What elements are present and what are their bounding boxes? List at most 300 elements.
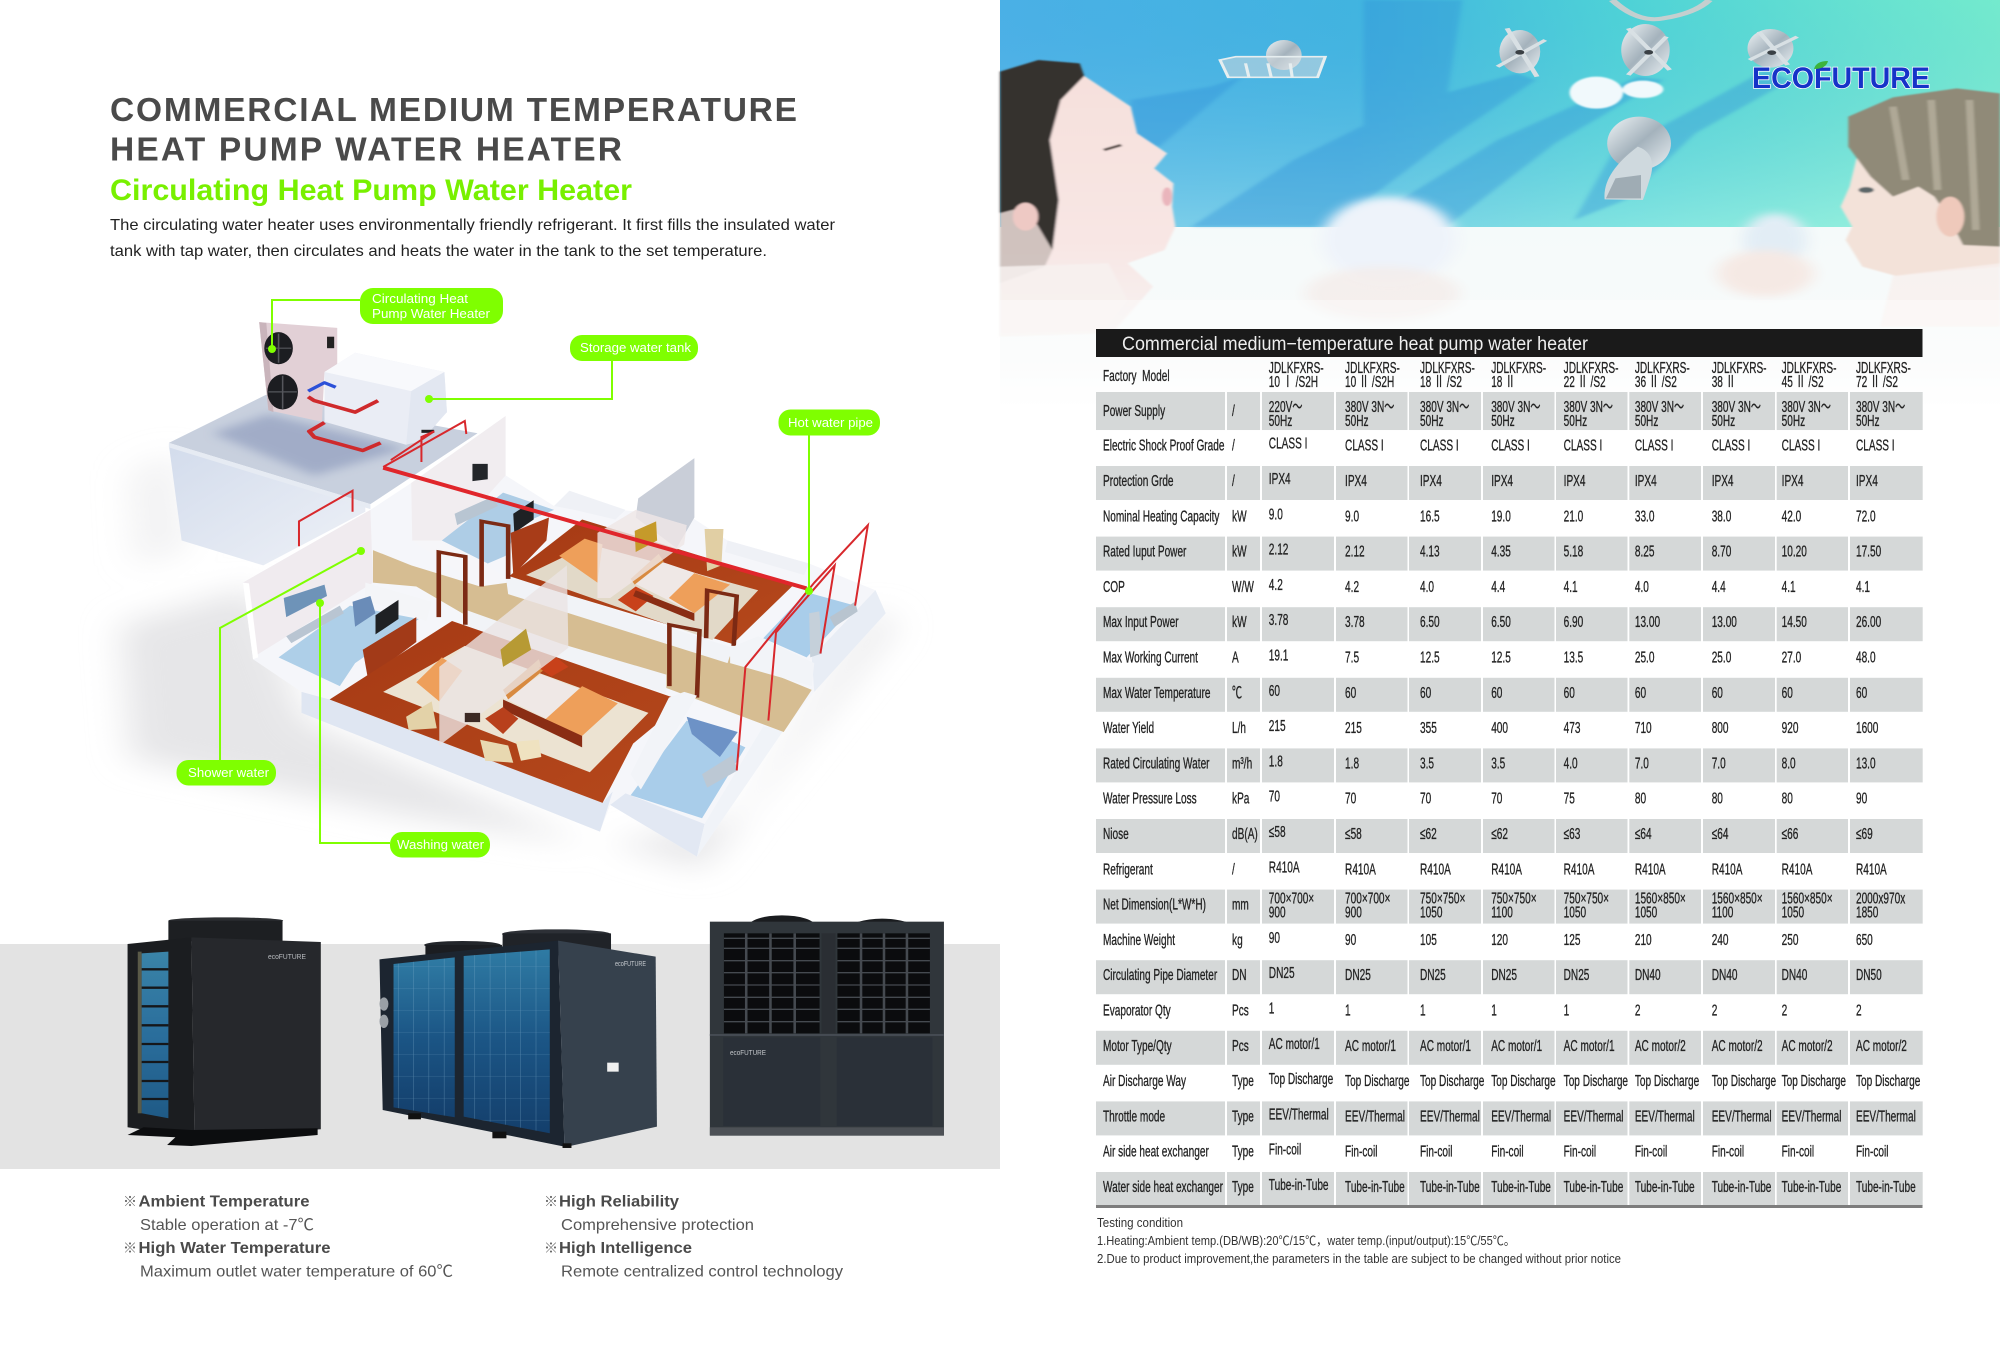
row: evaporator: 1 bbox=[1269, 999, 1274, 1017]
row: pipe diameter: DN bbox=[1232, 966, 1247, 984]
row: COP: W/W bbox=[1232, 578, 1254, 595]
row: max current bbox=[1103, 646, 1876, 666]
row: max input: 13.00 bbox=[1635, 613, 1660, 631]
row: power supply: / bbox=[1232, 402, 1235, 420]
row: air side exchanger: Air side heat exchanger bbox=[1103, 1142, 1209, 1160]
row: max water temperature: 60 bbox=[1269, 681, 1280, 699]
row: throttle: EEV/Thermal bbox=[1635, 1107, 1695, 1125]
spout bbox=[1604, 117, 1671, 200]
row: max water temperature: 60 bbox=[1564, 683, 1575, 701]
row: air side exchanger: Fin-coil bbox=[1564, 1142, 1596, 1160]
row: COP: 4.0 bbox=[1420, 578, 1434, 595]
row: power supply: 50Hz bbox=[1635, 412, 1659, 430]
foam and hands bbox=[1306, 197, 1813, 320]
row: COP bbox=[1103, 576, 1870, 595]
row: COP: 4.4 bbox=[1712, 578, 1726, 595]
row: power supply: 50Hz bbox=[1269, 412, 1293, 430]
row: water yield: 920 bbox=[1782, 719, 1798, 737]
row: protection: IPX4 bbox=[1635, 472, 1657, 490]
row: max water temperature: 60 bbox=[1420, 683, 1431, 701]
row: COP: 4.1 bbox=[1564, 578, 1578, 595]
row: air side exchanger bbox=[1103, 1140, 1888, 1160]
row: protection bbox=[1096, 466, 1923, 500]
row: evaporator: 2 bbox=[1856, 1001, 1862, 1019]
row: COP: 4.0 bbox=[1635, 578, 1649, 595]
row: refrigerant: R410A bbox=[1782, 860, 1812, 878]
row: pipe diameter: DN25 bbox=[1491, 966, 1517, 984]
row: net dimension: 1850 bbox=[1856, 903, 1878, 921]
row: net dimension: 750×750× bbox=[1564, 889, 1609, 907]
row: factory model: 22 Ⅱ /S2 bbox=[1564, 373, 1606, 391]
row: refrigerant: R410A bbox=[1856, 860, 1887, 878]
row: net dimension: 750×750× bbox=[1420, 889, 1465, 907]
child bbox=[1841, 88, 2000, 327]
row: electric shock bbox=[1103, 434, 1895, 454]
row: noise: ≤64 bbox=[1635, 825, 1652, 843]
row: water yield: 1600 bbox=[1856, 719, 1878, 737]
row: rated input: kW bbox=[1232, 542, 1247, 560]
row: rated input bbox=[1096, 537, 1923, 571]
row: power supply: 380V 3N～ bbox=[1564, 398, 1613, 416]
row: evaporator: 1 bbox=[1345, 1001, 1351, 1019]
row: rated input: 2.12 bbox=[1269, 540, 1288, 558]
row: circulating water: 1.8 bbox=[1345, 754, 1359, 772]
row: nominal heating: Nominal Heating Capacity bbox=[1103, 507, 1220, 525]
row: water side exchanger: Tube-in-Tube bbox=[1420, 1178, 1480, 1196]
row: noise: ≤69 bbox=[1856, 825, 1873, 843]
row: factory model: 72 Ⅱ /S2 bbox=[1856, 373, 1898, 391]
row: noise: ≤58 bbox=[1269, 823, 1286, 841]
row: rated input: 4.35 bbox=[1491, 542, 1511, 560]
product logo 2: ecoFUTURE bbox=[615, 959, 646, 968]
intro paragraph: tank with tap water, then circulates and heats the water in the tank to the set temperature. bbox=[110, 243, 767, 260]
row: air side exchanger: Fin-coil bbox=[1856, 1142, 1888, 1160]
row: power supply: 50Hz bbox=[1491, 412, 1515, 430]
row: pressure loss: 70 bbox=[1345, 789, 1356, 807]
row: pipe diameter: DN40 bbox=[1635, 966, 1661, 984]
row: net dimension: 1050 bbox=[1782, 903, 1804, 921]
row: circulating water: Rated Circulating Water bbox=[1103, 754, 1210, 772]
row: max current: 48.0 bbox=[1856, 648, 1876, 666]
row: water side exchanger: Tube-in-Tube bbox=[1564, 1178, 1623, 1196]
intro paragraph bbox=[110, 217, 836, 260]
row: max current: 27.0 bbox=[1782, 648, 1801, 666]
row: pipe diameter: DN25 bbox=[1345, 966, 1371, 984]
feature list right: High Reliability bbox=[559, 1194, 679, 1210]
row: water side exchanger: Tube-in-Tube bbox=[1782, 1178, 1841, 1196]
row: pipe diameter: DN25 bbox=[1564, 966, 1589, 984]
row: max input: kW bbox=[1232, 613, 1247, 631]
row: factory model: 18 Ⅱ bbox=[1491, 373, 1515, 391]
row: max water temperature: Max Water Temperature bbox=[1103, 683, 1210, 701]
callout: hot water pipe bbox=[778, 410, 880, 595]
row: electric shock: CLASS I bbox=[1712, 436, 1750, 454]
row: max water temperature: 60 bbox=[1491, 683, 1502, 701]
woman bbox=[1000, 60, 1175, 337]
row: power supply: 50Hz bbox=[1712, 412, 1735, 430]
row: electric shock: CLASS I bbox=[1269, 434, 1307, 452]
row: air side exchanger: Fin-coil bbox=[1491, 1142, 1524, 1160]
row: protection: IPX4 bbox=[1491, 472, 1513, 490]
row: protection: IPX4 bbox=[1420, 472, 1442, 490]
row: net dimension: 750×750× bbox=[1491, 889, 1537, 907]
feature list left: Maximum outlet water temperature of 60℃ bbox=[140, 1264, 453, 1280]
row: factory model: JDLKFXRS- bbox=[1269, 359, 1324, 377]
callout: hot water pipe: Hot water pipe bbox=[788, 415, 873, 430]
hot water pipes bbox=[299, 421, 868, 770]
banner: bathroom scene bbox=[1000, 0, 2000, 410]
title: COMMERCIAL MEDIUM TEMPERATURE bbox=[110, 92, 797, 129]
row: machine weight: 240 bbox=[1712, 931, 1729, 948]
row: evaporator: 2 bbox=[1782, 1001, 1787, 1019]
title: HEAT PUMP WATER HEATER bbox=[110, 132, 622, 168]
ground shadows bbox=[120, 452, 896, 870]
table header bar: Commercial medium−temperature heat pump water heater bbox=[1122, 334, 1589, 355]
row: refrigerant: R410A bbox=[1420, 860, 1451, 878]
row: refrigerant: / bbox=[1232, 860, 1235, 878]
row: pipe diameter: DN40 bbox=[1782, 966, 1807, 984]
row: protection: IPX4 bbox=[1269, 470, 1291, 488]
row: water yield bbox=[1103, 717, 1878, 737]
row: pressure loss: 70 bbox=[1269, 787, 1280, 805]
row: air discharge: Top Discharge bbox=[1712, 1072, 1776, 1090]
row: factory model: 45 Ⅱ /S2 bbox=[1782, 373, 1824, 391]
row: air side exchanger: Type bbox=[1232, 1142, 1254, 1160]
row: net dimension: 700×700× bbox=[1269, 889, 1314, 907]
row: machine weight: 650 bbox=[1856, 931, 1873, 948]
row: pressure loss: 90 bbox=[1856, 789, 1867, 807]
grey product band bbox=[0, 944, 1000, 1169]
callout: heat pump: Pump Water Heater bbox=[372, 306, 491, 321]
row: water yield: 215 bbox=[1345, 719, 1362, 737]
handles bbox=[1497, 24, 1797, 77]
row: net dimension: mm bbox=[1232, 895, 1249, 913]
row: max input: 6.50 bbox=[1420, 613, 1440, 631]
row: throttle: EEV/Thermal bbox=[1712, 1107, 1772, 1125]
row: water side exchanger: Tube-in-Tube bbox=[1712, 1178, 1771, 1196]
row: max water temperature: ℃ bbox=[1232, 683, 1242, 701]
row: noise: Niose bbox=[1103, 825, 1129, 843]
row: throttle: Type bbox=[1232, 1107, 1254, 1125]
row: net dimension: 1100 bbox=[1712, 903, 1733, 921]
intro paragraph: The circulating water heater uses environmentally friendly refrigerant. It first fills the insulated water bbox=[110, 217, 836, 234]
product logo 1: ecoFUTURE bbox=[268, 952, 306, 961]
row: power supply: 380V 3N～ bbox=[1782, 398, 1831, 416]
feature list left: Ambient Temperature bbox=[138, 1194, 310, 1210]
row: factory model: 38 Ⅱ bbox=[1712, 373, 1736, 391]
feature list left: ※ bbox=[123, 1194, 137, 1210]
row: electric shock: CLASS I bbox=[1345, 436, 1384, 454]
row: max water temperature: 60 bbox=[1635, 683, 1646, 701]
row: factory model: JDLKFXRS- bbox=[1564, 359, 1619, 377]
row: COP: 4.4 bbox=[1491, 578, 1506, 595]
row: air discharge: Top Discharge bbox=[1782, 1072, 1846, 1090]
row: net dimension: 1560×850× bbox=[1712, 889, 1763, 907]
feature list left: Stable operation at -7℃ bbox=[140, 1217, 314, 1234]
row: power supply: 50Hz bbox=[1564, 412, 1587, 430]
row: noise: ≤58 bbox=[1345, 825, 1362, 843]
row: evaporator bbox=[1103, 999, 1862, 1019]
row: noise: ≤63 bbox=[1564, 825, 1580, 843]
wall gradient bbox=[1000, 0, 2000, 228]
row: electric shock: CLASS I bbox=[1635, 436, 1673, 454]
row: pressure loss: 75 bbox=[1564, 789, 1575, 807]
row: air discharge: Type bbox=[1232, 1072, 1254, 1090]
row: rated input: 4.13 bbox=[1420, 542, 1440, 560]
row: COP: COP bbox=[1103, 578, 1125, 595]
row: air discharge: Top Discharge bbox=[1564, 1072, 1628, 1090]
row: machine weight: 120 bbox=[1491, 931, 1508, 948]
row: max input: 6.50 bbox=[1491, 613, 1511, 631]
lower guest room bbox=[330, 565, 684, 803]
row: max current: 12.5 bbox=[1491, 648, 1511, 666]
row: power supply bbox=[1096, 392, 1923, 430]
row: machine weight: kg bbox=[1232, 931, 1243, 948]
row: circulating water: 4.0 bbox=[1564, 754, 1578, 772]
row: max input: 13.00 bbox=[1712, 613, 1737, 631]
row: air side exchanger: Fin-coil bbox=[1782, 1142, 1814, 1160]
row: machine weight: 90 bbox=[1345, 931, 1356, 948]
heat pump unit bbox=[259, 322, 337, 422]
row: factory model: 10 Ⅰ /S2H bbox=[1269, 373, 1318, 391]
bath foam base bbox=[1000, 227, 2000, 407]
row: nominal heating: 16.5 bbox=[1420, 507, 1440, 525]
row: max water temperature bbox=[1096, 678, 1923, 712]
product: large front-view heat pump bbox=[710, 915, 944, 1136]
row: nominal heating: 33.0 bbox=[1635, 507, 1654, 525]
row: max input: 3.78 bbox=[1269, 611, 1288, 629]
row: net dimension: 900 bbox=[1269, 903, 1286, 921]
row: air side exchanger: Fin-coil bbox=[1420, 1142, 1452, 1160]
row: water yield: 473 bbox=[1564, 719, 1580, 737]
row: water side exchanger bbox=[1096, 1172, 1923, 1206]
row: throttle: EEV/Thermal bbox=[1856, 1107, 1916, 1125]
row: circulating water: 7.0 bbox=[1635, 754, 1649, 772]
row: noise: ≤62 bbox=[1491, 825, 1508, 843]
row: electric shock: CLASS I bbox=[1782, 436, 1820, 454]
product logo 3: ecoFUTURE bbox=[730, 1048, 766, 1057]
row: circulating water: 8.0 bbox=[1782, 754, 1796, 772]
soap dish bbox=[1220, 40, 1325, 77]
row: max water temperature: 60 bbox=[1712, 683, 1723, 701]
product: tower heat pump bbox=[128, 917, 321, 1146]
row: motor: AC motor/1 bbox=[1269, 1034, 1320, 1052]
wall shadows bbox=[1131, 0, 1791, 227]
row: protection: IPX4 bbox=[1782, 472, 1804, 490]
testing notes bbox=[1097, 1216, 1621, 1266]
row: evaporator: 1 bbox=[1420, 1001, 1426, 1019]
row: air discharge: Top Discharge bbox=[1269, 1070, 1333, 1088]
row: water side exchanger: Tube-in-Tube bbox=[1345, 1178, 1405, 1196]
row: factory model: JDLKFXRS- bbox=[1491, 359, 1546, 377]
row: evaporator: Pcs bbox=[1232, 1001, 1249, 1019]
row: power supply: Power Supply bbox=[1103, 402, 1165, 420]
row: motor: Pcs bbox=[1232, 1036, 1249, 1054]
row: refrigerant: R410A bbox=[1712, 860, 1743, 878]
row: throttle: EEV/Thermal bbox=[1420, 1107, 1480, 1125]
row: circulating water: 7.0 bbox=[1712, 754, 1726, 772]
row: max current: 13.5 bbox=[1564, 648, 1583, 666]
row: throttle bbox=[1096, 1101, 1923, 1135]
tank pipes bbox=[308, 383, 434, 450]
row: evaporator: 1 bbox=[1564, 1001, 1569, 1019]
row: max current: Max Working Current bbox=[1103, 648, 1198, 666]
row: pressure loss: 80 bbox=[1635, 789, 1646, 807]
row: throttle: Throttle mode bbox=[1103, 1107, 1165, 1125]
feature list right: ※ bbox=[544, 1240, 558, 1256]
illustration: isometric building cutaway bbox=[120, 322, 896, 870]
row: air side exchanger: Fin-coil bbox=[1269, 1140, 1301, 1158]
row: air discharge: Top Discharge bbox=[1345, 1072, 1409, 1090]
row: net dimension: 1100 bbox=[1491, 903, 1513, 921]
row: pipe diameter: DN25 bbox=[1269, 964, 1295, 982]
row: rated input: 10.20 bbox=[1782, 542, 1807, 560]
row: COP: 4.2 bbox=[1269, 576, 1283, 593]
row: water side exchanger: Water side heat exchanger bbox=[1103, 1178, 1223, 1196]
row: refrigerant: R410A bbox=[1491, 860, 1522, 878]
row: net dimension bbox=[1096, 889, 1923, 924]
row: throttle: EEV/Thermal bbox=[1564, 1107, 1624, 1125]
feature list right: Comprehensive protection bbox=[561, 1217, 754, 1234]
row: max current: 25.0 bbox=[1635, 648, 1654, 666]
row: motor: AC motor/2 bbox=[1635, 1036, 1686, 1054]
foam on wall bbox=[1570, 77, 1663, 109]
row: evaporator: Evaporator Qty bbox=[1103, 1001, 1171, 1019]
subtitle: Circulating Heat Pump Water Heater bbox=[110, 174, 632, 207]
row: water yield: L/h bbox=[1232, 719, 1246, 737]
row: nominal heating: 21.0 bbox=[1564, 507, 1583, 525]
row: refrigerant: R410A bbox=[1564, 860, 1595, 878]
row: max water temperature: 60 bbox=[1782, 683, 1793, 701]
row: power supply: 380V 3N～ bbox=[1856, 398, 1905, 416]
row: net dimension: 1050 bbox=[1635, 903, 1657, 921]
row: factory model: 36 Ⅱ /S2 bbox=[1635, 373, 1677, 391]
row: pressure loss: 80 bbox=[1782, 789, 1793, 807]
row: max water temperature: 60 bbox=[1345, 683, 1356, 701]
row: motor: AC motor/1 bbox=[1491, 1036, 1542, 1054]
row: noise: ≤62 bbox=[1420, 825, 1437, 843]
row: pipe diameter: DN50 bbox=[1856, 966, 1882, 984]
row: max water temperature: 60 bbox=[1856, 683, 1867, 701]
row: power supply: 380V 3N～ bbox=[1491, 398, 1540, 416]
row: power supply: 380V 3N～ bbox=[1420, 398, 1469, 416]
row: power supply: 380V 3N～ bbox=[1635, 398, 1684, 416]
row: noise: ≤64 bbox=[1712, 825, 1729, 843]
testing notes: 2.Due to product improvement,the parameters in the table are subject to be changed without prior notice bbox=[1097, 1252, 1621, 1266]
row: net dimension: Net Dimension(L*W*H) bbox=[1103, 895, 1206, 913]
row: pressure loss bbox=[1103, 787, 1867, 807]
row: water yield: 400 bbox=[1491, 719, 1508, 737]
row: power supply: 50Hz bbox=[1782, 412, 1805, 430]
row: water yield: 800 bbox=[1712, 719, 1729, 737]
row: electric shock: CLASS I bbox=[1856, 436, 1895, 454]
feature list left: ※ bbox=[123, 1240, 137, 1256]
lower right bathroom bbox=[631, 692, 745, 818]
row: COP: 4.2 bbox=[1345, 578, 1359, 595]
row: motor: AC motor/2 bbox=[1856, 1036, 1907, 1054]
row: factory model bbox=[1103, 359, 1911, 391]
row: max input bbox=[1096, 607, 1923, 641]
row: factory model: JDLKFXRS- bbox=[1635, 359, 1690, 377]
row: machine weight: 105 bbox=[1420, 931, 1437, 948]
row: machine weight: 125 bbox=[1564, 931, 1580, 948]
feature list right bbox=[544, 1194, 843, 1280]
row: rated input: 17.50 bbox=[1856, 542, 1881, 560]
upper guest room bbox=[508, 458, 809, 644]
row: motor: Motor Type/Qty bbox=[1103, 1036, 1172, 1054]
row: factory model: JDLKFXRS- bbox=[1420, 359, 1475, 377]
callout: washing water: Washing water bbox=[397, 837, 485, 852]
row: air discharge: Air Discharge Way bbox=[1103, 1072, 1186, 1090]
row: machine weight: 210 bbox=[1635, 931, 1652, 948]
row: max input: 3.78 bbox=[1345, 613, 1365, 631]
row: factory model: JDLKFXRS- bbox=[1782, 359, 1836, 377]
row: motor: AC motor/2 bbox=[1782, 1036, 1833, 1054]
callout: storage water tank: Storage water tank bbox=[580, 340, 691, 355]
row: power supply: 380V 3N～ bbox=[1345, 398, 1394, 416]
left wall bbox=[243, 510, 373, 659]
row: refrigerant bbox=[1103, 858, 1887, 878]
row: air side exchanger: Fin-coil bbox=[1345, 1142, 1378, 1160]
row: nominal heating: 19.0 bbox=[1491, 507, 1511, 525]
row: electric shock: Electric Shock Proof Grade bbox=[1103, 436, 1224, 454]
hose bbox=[1612, 0, 1709, 19]
row: protection: Protection Grde bbox=[1103, 472, 1174, 490]
row: air discharge bbox=[1103, 1070, 1920, 1090]
row: factory model: JDLKFXRS- bbox=[1345, 359, 1400, 377]
row: rated input: 8.25 bbox=[1635, 542, 1654, 560]
row: rated input: 8.70 bbox=[1712, 542, 1731, 560]
row: motor: AC motor/1 bbox=[1420, 1036, 1471, 1054]
row: power supply: 380V 3N～ bbox=[1712, 398, 1761, 416]
upper white wall and bathroom bbox=[411, 416, 554, 586]
row: factory model: JDLKFXRS- bbox=[1856, 359, 1911, 377]
row: max current: 19.1 bbox=[1269, 646, 1288, 664]
row: air discharge: Top Discharge bbox=[1635, 1072, 1699, 1090]
row: water yield: 215 bbox=[1269, 717, 1286, 735]
row: pressure loss: 70 bbox=[1491, 789, 1502, 807]
row: factory model: JDLKFXRS- bbox=[1712, 359, 1767, 377]
corridor floor bbox=[373, 550, 812, 732]
row: circulating water: 3.5 bbox=[1491, 754, 1505, 772]
callout: shower water: Shower water bbox=[188, 765, 270, 780]
row: net dimension: 1560×850× bbox=[1782, 889, 1833, 907]
row: water side exchanger: Tube-in-Tube bbox=[1491, 1178, 1551, 1196]
rooftop block bbox=[169, 395, 478, 565]
logo: ECOFUTURE: ECOFUTURE bbox=[1752, 62, 1930, 95]
row: evaporator: 1 bbox=[1491, 1001, 1497, 1019]
row: air discharge: Top Discharge bbox=[1420, 1072, 1484, 1090]
row: circulating water: 13.0 bbox=[1856, 754, 1876, 772]
callout: shower water bbox=[176, 547, 365, 786]
row: factory model: 10 Ⅱ /S2H bbox=[1345, 373, 1394, 391]
row: refrigerant: R410A bbox=[1345, 860, 1376, 878]
row: noise: dB(A) bbox=[1232, 825, 1258, 843]
row: nominal heating: 72.0 bbox=[1856, 507, 1876, 525]
row: refrigerant: R410A bbox=[1269, 858, 1300, 876]
row: circulating water bbox=[1096, 748, 1923, 782]
row: electric shock: CLASS I bbox=[1491, 436, 1530, 454]
row: protection: IPX4 bbox=[1712, 472, 1734, 490]
lower fade to white bbox=[1000, 300, 2000, 410]
row: net dimension: 700×700× bbox=[1345, 889, 1390, 907]
row: pipe diameter: Circulating Pipe Diameter bbox=[1103, 966, 1218, 984]
row: noise: ≤66 bbox=[1782, 825, 1798, 843]
row: air discharge: Top Discharge bbox=[1491, 1072, 1556, 1090]
testing notes: Testing condition bbox=[1097, 1216, 1183, 1230]
row: max input: 26.00 bbox=[1856, 613, 1881, 631]
row: nominal heating: 42.0 bbox=[1782, 507, 1801, 525]
